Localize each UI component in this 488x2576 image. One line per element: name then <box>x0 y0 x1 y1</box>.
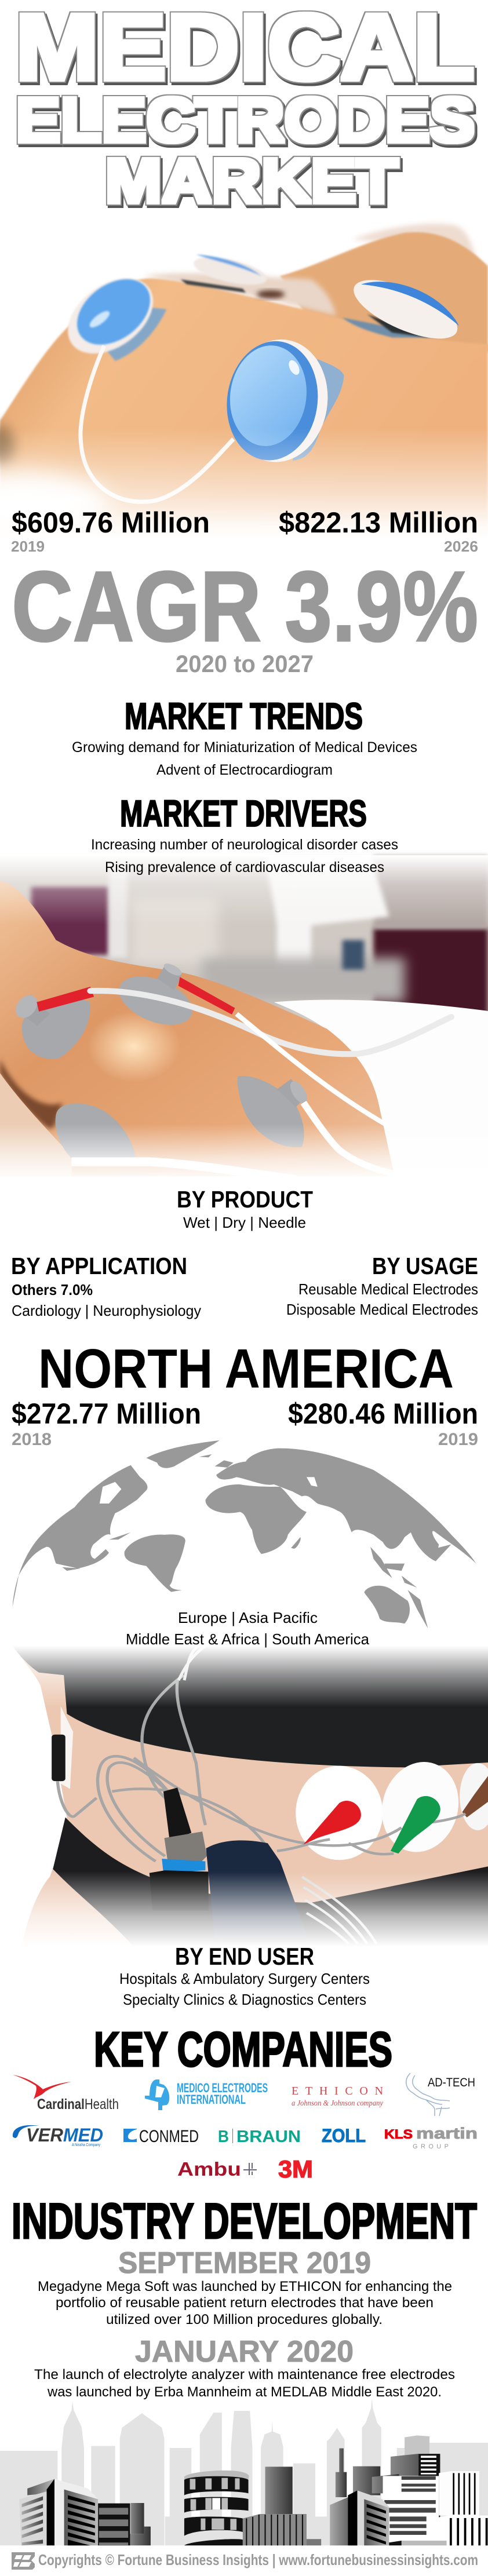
logo: Ethicon <box>292 2085 384 2108</box>
by application: Others 7.0% <box>12 1281 93 1298</box>
by product: BY PRODUCT <box>177 1186 313 1213</box>
stat: 2019 value <box>11 506 210 555</box>
south america <box>125 1534 185 1592</box>
red connector upper <box>179 977 235 1015</box>
logo: Medico Electrodes International: INTERNATIONAL <box>177 2092 246 2107</box>
uk and islands <box>199 1454 234 1468</box>
southeast asia islands <box>370 1544 451 1588</box>
africa <box>205 1484 307 1554</box>
shirt <box>9 1641 488 1767</box>
lower right cup <box>238 1076 311 1147</box>
trend items: Growing demand for Miniaturization of Medical Devices <box>72 739 417 756</box>
key companies heading: KEY COMPANIES <box>94 2022 392 2077</box>
bottom-left white wash <box>0 472 110 536</box>
stat: 2026 value: $822.13 Million <box>279 506 478 539</box>
stat: 2019 value: 2019 <box>11 538 45 555</box>
september 2019 entry: SEPTEMBER 2019 <box>118 2246 371 2280</box>
by end user: BY END USER <box>175 1943 314 1970</box>
regions list: Europe | Asia Pacific <box>178 1609 318 1626</box>
january 2020 entry: The launch of electrolyte analyzer with maintenance free electrodes <box>34 2367 455 2382</box>
logo: Vermed: VERMED <box>26 2125 103 2146</box>
logo: KLS Martin <box>384 2125 478 2150</box>
logo: KLS Martin: KLS <box>384 2127 413 2141</box>
madagascar <box>291 1537 301 1549</box>
icon: Fortune Business Insights logo <box>12 2552 35 2570</box>
stat: 2019 value: 2019 <box>438 1430 478 1449</box>
grey wire loops <box>57 1675 465 1861</box>
left cup <box>12 991 90 1059</box>
central low block <box>243 2514 321 2545</box>
logo: ConMed: CONMED <box>139 2127 199 2146</box>
regions list <box>126 1609 370 1648</box>
rear blurred electrode <box>192 251 269 290</box>
logo: AD-Tech: AD-TECH <box>428 2076 475 2089</box>
skyline <box>0 2399 488 2545</box>
by application: Cardiology | Neurophysiology <box>12 1302 201 1319</box>
logo: B Braun: BRAUN <box>236 2128 301 2146</box>
by application: BY APPLICATION <box>11 1253 187 1279</box>
australia region <box>364 1586 410 1623</box>
title <box>15 0 475 216</box>
white twisted wires <box>179 1643 212 1680</box>
logo: Cardinal Health <box>13 2075 119 2112</box>
lower cup <box>56 1103 137 1162</box>
right tower group <box>330 2449 488 2545</box>
white cable 1 <box>90 991 451 1054</box>
by usage: Reusable Medical Electrodes <box>298 1280 478 1298</box>
large blue electrode <box>218 331 344 470</box>
lower right cable <box>304 1103 436 1180</box>
blue bezel <box>162 1859 205 1873</box>
central tall block <box>265 2466 293 2515</box>
heading: MARKET TRENDS <box>125 695 363 737</box>
lower cable <box>72 1162 296 1180</box>
dark gap <box>257 290 285 298</box>
torso <box>0 881 395 1180</box>
central america islands <box>62 1533 131 1571</box>
background buildings <box>0 2399 488 2545</box>
metal clip <box>165 1831 207 1864</box>
plug <box>163 1787 191 1841</box>
heading: MARKET DRIVERS <box>120 793 367 834</box>
by end user: Specialty Clinics & Diagnostics Centers <box>123 1991 366 2008</box>
highlight <box>87 1011 180 1082</box>
stat: 2026 value: 2026 <box>444 538 478 555</box>
market trends: Advent of Electrocardiogram <box>156 762 333 778</box>
north america <box>12 1465 147 1607</box>
january 2020 entry: was launched by Erba Mannheim at MEDLAB Middle East 2020. <box>47 2384 442 2400</box>
footer <box>12 2551 478 2570</box>
january 2020 entry: JANUARY 2020 <box>135 2335 354 2369</box>
by usage: Disposable Medical Electrodes <box>286 1301 478 1318</box>
towel <box>0 1073 72 1180</box>
logo: 3M: 3M <box>278 2155 313 2183</box>
logo: Ethicon: ETHICON <box>292 2085 383 2097</box>
fabric <box>352 224 478 262</box>
market trends <box>72 695 417 778</box>
blurred room <box>0 856 488 1035</box>
stat: 2018 value: $272.77 Million <box>12 1398 201 1430</box>
main leg <box>0 279 488 537</box>
by application <box>11 1253 201 1319</box>
regions list: Middle East & Africa | South America <box>126 1630 370 1648</box>
greenland <box>146 1440 220 1468</box>
logo: AD-Tech <box>406 2073 475 2116</box>
left building <box>19 2479 98 2545</box>
september 2019 entry: portfolio of reusable patient return electrodes that have been <box>56 2295 434 2311</box>
logo: Cardinal Health: CardinalHealth <box>37 2096 119 2112</box>
photo bottom fade <box>0 429 488 550</box>
logo: Ethicon: a Johnson & Johnson company <box>292 2099 384 2108</box>
industry development <box>12 2194 477 2400</box>
top strap <box>143 273 336 316</box>
stat: 2019 value: $280.46 Million <box>288 1398 478 1430</box>
market drivers <box>91 793 398 875</box>
by usage <box>286 1253 478 1318</box>
logo: ConMed <box>123 2127 199 2146</box>
globe map <box>12 1440 476 1629</box>
shadow <box>0 1059 62 1129</box>
logo: Ambu <box>177 2158 257 2180</box>
photo: suction electrodes on chest <box>0 855 488 1188</box>
september 2019 entry: utilized over 100 Million procedures globally. <box>106 2312 383 2327</box>
wire <box>81 346 234 502</box>
right electrode <box>343 268 464 351</box>
logo: B Braun: B <box>218 2128 229 2146</box>
top fade <box>0 855 488 925</box>
by product: Wet | Dry | Needle <box>183 1214 306 1231</box>
logo: Medico Electrodes International <box>145 2079 268 2110</box>
green snap <box>391 1796 440 1853</box>
by product <box>177 1186 313 1231</box>
bottom fade <box>0 1124 488 1182</box>
stat: 2018 value <box>12 1398 201 1449</box>
eurasia <box>216 1448 476 1564</box>
bottom fade <box>0 1871 488 1947</box>
photo: wearable ECG monitor <box>0 1637 488 1947</box>
navy strap <box>206 1840 308 1939</box>
lower black waistband <box>53 1818 488 1947</box>
logo: Zoll: ZOLL <box>322 2125 366 2146</box>
sheet <box>274 999 488 1183</box>
top fade <box>0 1637 488 1707</box>
waist skin <box>9 1641 488 1947</box>
driver items: Increasing number of neurological disorder cases <box>91 837 398 853</box>
company logos <box>13 2073 478 2183</box>
white electrode pads <box>296 1758 488 1860</box>
stat: 2019 value: $609.76 Million <box>12 506 210 539</box>
by end user: Hospitals & Ambulatory Surgery Centers <box>119 1970 370 1987</box>
rear leg <box>280 232 488 352</box>
left pad <box>52 1706 73 1789</box>
stat: 2019 value <box>288 1398 478 1449</box>
upper cup <box>111 961 200 1035</box>
white cable 2 <box>236 1014 389 1126</box>
grey block <box>405 2435 429 2457</box>
photo: electrodes on legs <box>0 224 488 550</box>
title line: MARKET: MARKET <box>105 145 398 216</box>
white wire bundle <box>302 1877 377 1944</box>
shaded corner <box>0 426 14 466</box>
CAGR period: 2020 to 2027 <box>176 650 314 677</box>
low building <box>98 2503 151 2545</box>
logo: KLS Martin: martin <box>416 2125 478 2142</box>
logo: Vermed: A Nissha Company <box>72 2143 100 2147</box>
january 2020 entry <box>34 2335 455 2400</box>
brown snap <box>462 1776 488 1818</box>
red connector left <box>37 987 94 1012</box>
september 2019 entry: Megadyne Mega Soft was launched by ETHICON for enhancing the <box>38 2279 452 2294</box>
left electrode <box>55 262 166 369</box>
market drivers: Rising prevalence of cardiovascular diseases <box>105 859 384 875</box>
title line: ELECTRODES: ELECTRODES <box>16 85 475 155</box>
logo: Ambu: Ambu <box>177 2158 241 2180</box>
round tower <box>184 2471 249 2545</box>
red snap <box>304 1801 361 1844</box>
recorder body <box>150 1870 209 1910</box>
september 2019 entry <box>38 2246 452 2327</box>
stat: 2018 value: 2018 <box>12 1430 52 1449</box>
by end user <box>119 1943 370 2008</box>
stat: 2026 value <box>279 506 478 555</box>
logo: Medico Electrodes International: MEDICO ELECTRODES <box>177 2081 268 2095</box>
logo: KLS Martin: GROUP <box>413 2143 449 2150</box>
